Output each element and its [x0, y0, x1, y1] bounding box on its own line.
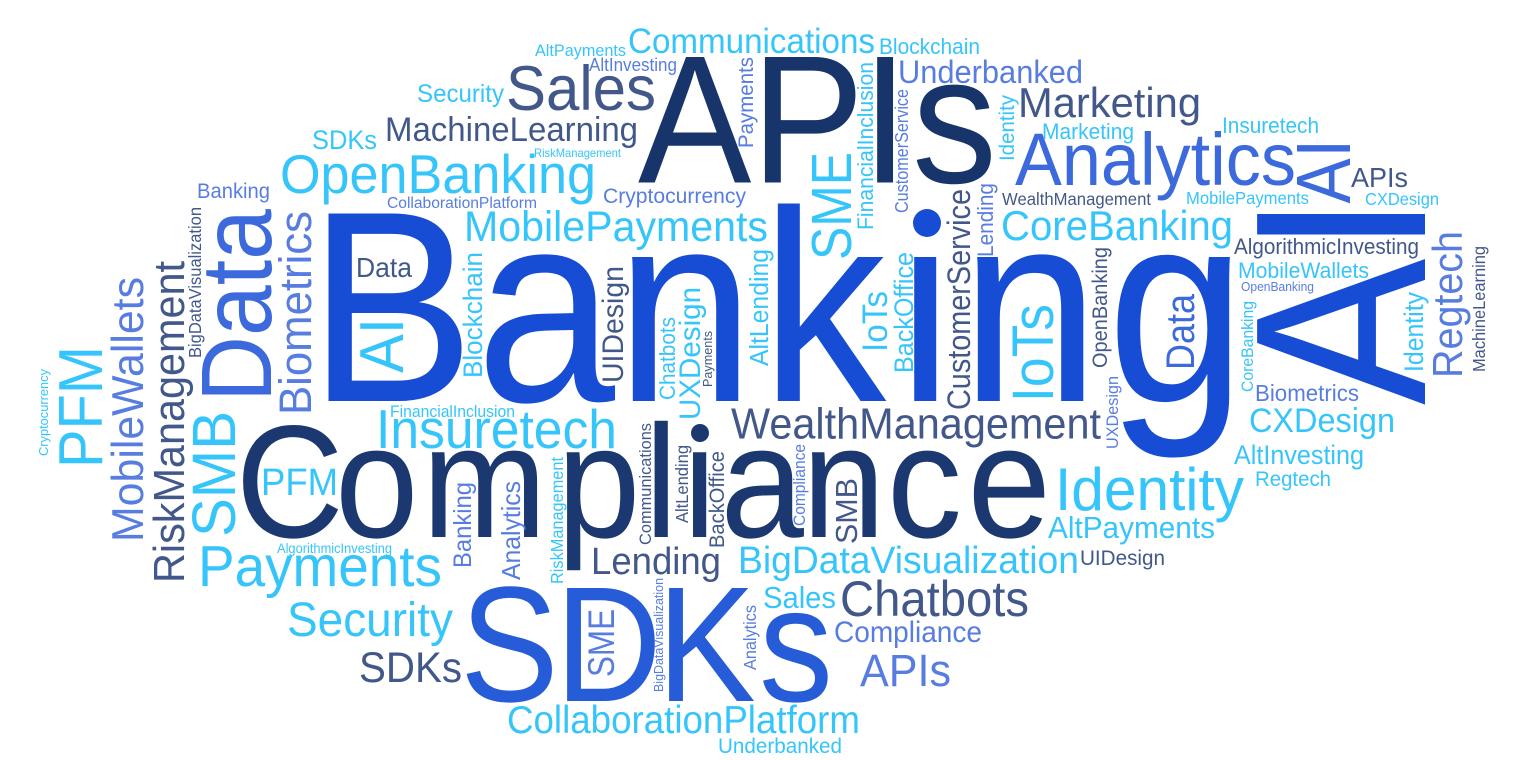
- word: PFM small: PFM: [261, 462, 338, 504]
- word: Banking: Banking: [308, 155, 1246, 461]
- word: Security: Security: [287, 593, 454, 647]
- word: OpenBanking: OpenBanking: [280, 143, 596, 205]
- word: MobilePayments: MobilePayments: [464, 203, 768, 251]
- word: AI top right vertical: AI: [1281, 139, 1367, 204]
- word: RiskManagement small vertical: RiskManagement: [548, 457, 567, 584]
- word: AltPayments: AltPayments: [1048, 510, 1215, 545]
- word: AltLending small vertical: AltLending: [672, 445, 692, 523]
- word: Payments tiny vertical: Payments: [700, 331, 715, 387]
- word: CXDesign: CXDesign: [1249, 402, 1395, 440]
- word: Data large vertical: Data: [181, 209, 293, 402]
- word: Compliance tiny vertical: Compliance: [791, 444, 809, 526]
- word: CustomerService small vertical: CustomerService: [892, 89, 912, 213]
- word: BackOffice vertical: BackOffice: [889, 252, 919, 373]
- word: Compliance: Compliance: [236, 391, 1051, 571]
- word: UIDesign vertical: UIDesign: [597, 266, 630, 383]
- word: Lending: Lending: [591, 540, 721, 583]
- word: SME vertical: SME: [800, 152, 864, 260]
- word: OpenBanking small: OpenBanking: [1241, 279, 1314, 294]
- word: IoTs large vertical: IoTs: [1001, 304, 1066, 402]
- word: FinancialInclusion vertical: FinancialInclusion: [853, 62, 878, 230]
- word: AI large vertical: AI: [1205, 194, 1478, 405]
- word: BigDataVisualization vertical: BigDataVisualization: [185, 207, 205, 358]
- word: SDKs: SDKs: [460, 553, 833, 737]
- word: Payments: Payments: [198, 535, 442, 599]
- word: CollaborationPlatform: CollaborationPlatform: [507, 699, 860, 742]
- word: Insuretech: Insuretech: [376, 399, 617, 460]
- word: APIs small: APIs: [1351, 162, 1408, 193]
- word: Sales small: Sales: [763, 580, 836, 615]
- word: Analytics small vertical: Analytics: [496, 481, 526, 580]
- word: SMB small vertical: SMB: [829, 478, 864, 544]
- word: APIs medium: APIs: [860, 645, 951, 696]
- word: FinancialInclusion small: FinancialInclusion: [390, 402, 515, 421]
- word: Blockchain: Blockchain: [879, 34, 980, 59]
- word: Identity small vertical: Identity: [995, 95, 1019, 161]
- word: Insuretech small: Insuretech: [1222, 113, 1319, 138]
- word: Marketing: Marketing: [1018, 79, 1201, 126]
- word: Blockchain vertical: Blockchain: [458, 252, 488, 378]
- word: AltInvesting: AltInvesting: [589, 55, 677, 75]
- word: Chatbots vertical: Chatbots: [655, 317, 680, 400]
- word: SMB vertical: SMB: [180, 411, 248, 537]
- word: UXDesign small vertical: UXDesign: [1103, 376, 1122, 449]
- word: WealthManagement small: WealthManagement: [1002, 189, 1151, 209]
- word: Compliance small: Compliance: [834, 616, 982, 649]
- word: Chatbots: Chatbots: [840, 571, 1029, 627]
- word: MachineLearning vertical: MachineLearning: [1469, 246, 1489, 372]
- word: Identity vertical: Identity: [1399, 291, 1429, 372]
- word: Regtech small: Regtech: [1255, 467, 1331, 491]
- word: UXDesign vertical: UXDesign: [674, 287, 707, 420]
- word: RiskManagement vertical: RiskManagement: [146, 261, 194, 583]
- word: AltInvesting: AltInvesting: [1234, 440, 1364, 470]
- word: OpenBanking vertical: OpenBanking: [1089, 247, 1112, 368]
- word: MobilePayments small: MobilePayments: [1186, 188, 1309, 208]
- word: AI inside B: AI: [348, 318, 417, 373]
- word: Biometrics small: Biometrics: [1255, 380, 1359, 406]
- word: Underbanked small: Underbanked: [718, 733, 842, 758]
- word: BigDataVisualization small vertical: BigDataVisualization: [651, 578, 666, 692]
- word: Identity: Identity: [1055, 455, 1245, 523]
- word: AlgorithmicInvesting small: AlgorithmicInvesting: [277, 541, 392, 556]
- word: CustomerService vertical: CustomerService: [941, 189, 977, 410]
- word: Analytics tiny vertical: Analytics: [740, 605, 760, 670]
- word: RiskManagement small: RiskManagement: [534, 146, 622, 160]
- word: MobileWallets small: MobileWallets: [1238, 258, 1369, 283]
- word: BackOffice small vertical: BackOffice: [705, 451, 729, 548]
- word: BigDataVisualization: BigDataVisualization: [738, 540, 1079, 582]
- word: Security: Security: [417, 80, 504, 108]
- word: Data vertical inside g: Data: [1159, 293, 1203, 370]
- word: CoreBanking vertical: CoreBanking: [1239, 301, 1257, 392]
- word: AltPayments: AltPayments: [535, 41, 626, 60]
- word: Communications: Communications: [628, 22, 875, 61]
- word: Sales: Sales: [506, 54, 656, 124]
- word: Regtech vertical: Regtech: [1425, 231, 1471, 378]
- word: Data small: Data: [356, 252, 413, 283]
- word: SDKs small: SDKs: [312, 125, 377, 155]
- word: WealthManagement: WealthManagement: [731, 400, 1101, 448]
- word: Banking small vertical: Banking: [449, 482, 477, 568]
- word: UIDesign: UIDesign: [1080, 545, 1165, 570]
- word: SDKs medium: SDKs: [359, 644, 462, 691]
- word: Lending small vertical: Lending: [973, 183, 998, 257]
- word: Biometrics vertical: Biometrics: [270, 211, 321, 415]
- word: MobileWallets vertical: MobileWallets: [104, 277, 153, 542]
- word: Communications vertical: Communications: [636, 423, 655, 545]
- word: Marketing small: Marketing: [1042, 119, 1134, 144]
- word: Analytics: Analytics: [1015, 118, 1296, 201]
- word: CXDesign small: CXDesign: [1365, 189, 1439, 209]
- word: PFM vertical: PFM: [47, 346, 116, 468]
- word: AlgorithmicInvesting: AlgorithmicInvesting: [1234, 234, 1419, 259]
- word: Cryptocurrency: Cryptocurrency: [603, 184, 746, 208]
- word: CoreBanking: CoreBanking: [1001, 202, 1233, 249]
- word: CollaborationPlatform small: CollaborationPlatform: [387, 195, 537, 212]
- word: MachineLearning: MachineLearning: [385, 111, 638, 149]
- word: APIs: APIs: [638, 18, 997, 222]
- word: Cryptocurrency vertical: Cryptocurrency: [36, 369, 51, 456]
- word: Banking small: Banking: [197, 180, 270, 203]
- word: Underbanked: Underbanked: [898, 54, 1083, 90]
- word: SME small vertical: SME: [581, 609, 622, 677]
- word: Payments vertical: Payments: [734, 57, 758, 148]
- word: IoTs small vertical: IoTs: [856, 291, 895, 352]
- word: AltLending vertical: AltLending: [746, 249, 774, 366]
